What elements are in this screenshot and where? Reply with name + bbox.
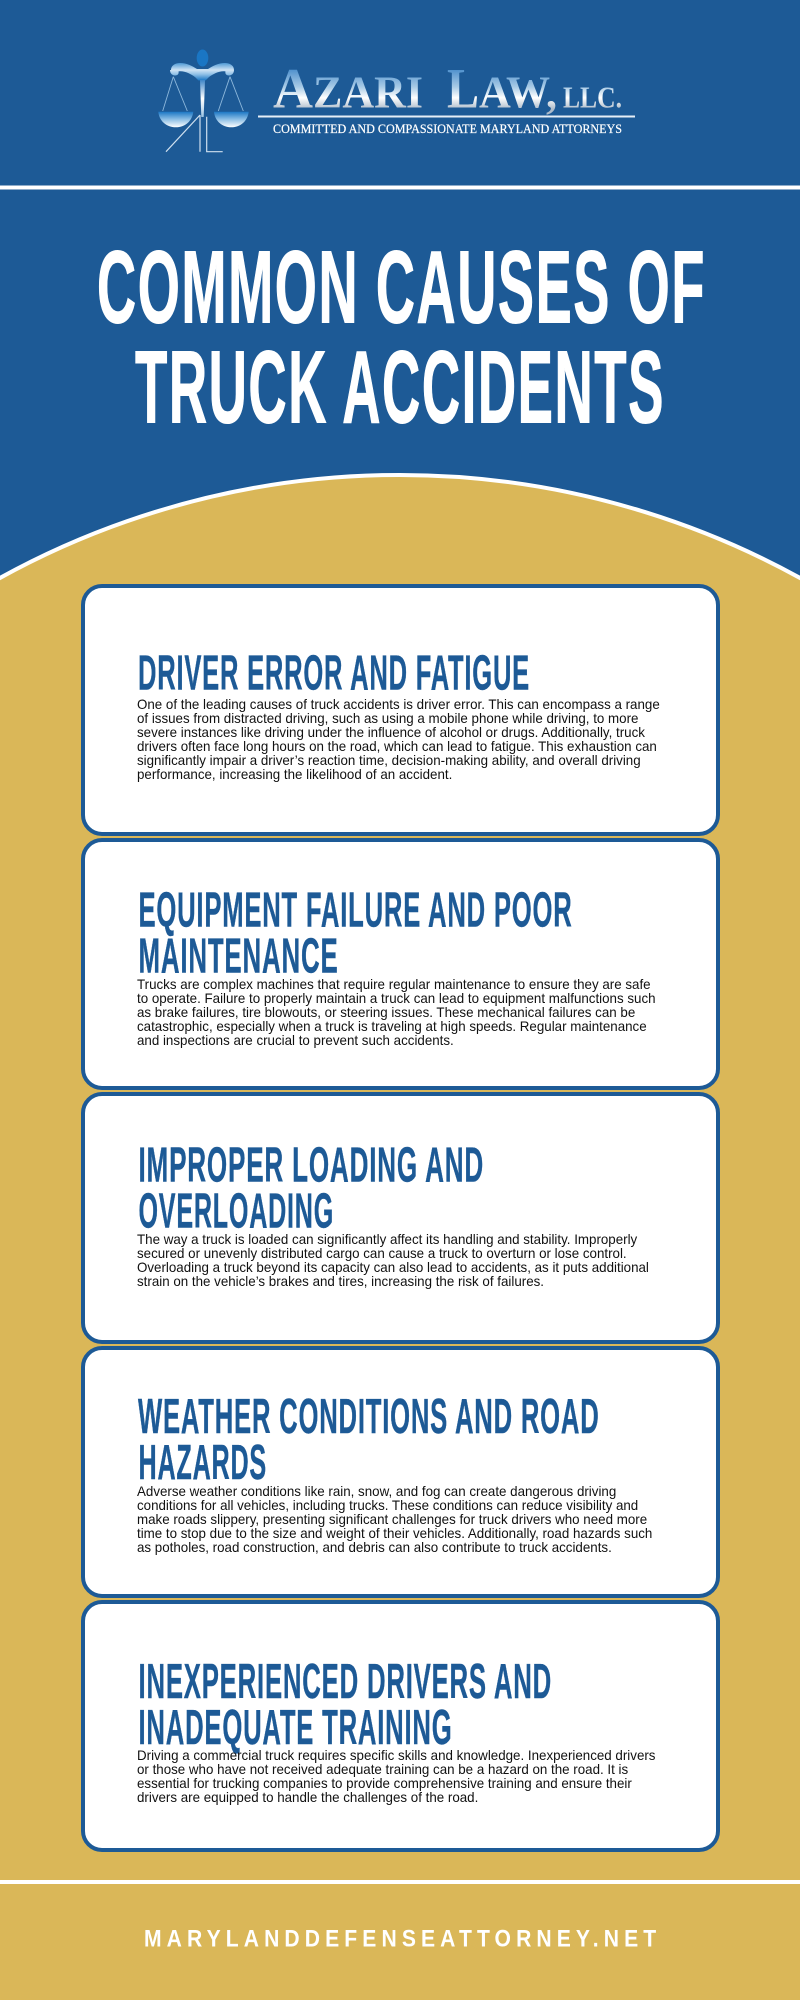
body text: and inspections are crucial to prevent such accidents.	[137, 1033, 454, 1048]
heading: MAINTENANCE	[138, 930, 338, 984]
body text: One of the leading causes of truck accidents is driver error. This can encompass a range	[137, 697, 660, 712]
body text: essential for trucking companies to provide comprehensive training and ensure their	[137, 1776, 632, 1791]
body text: Overloading a truck beyond its capacity can also lead to accidents, as it puts additional	[137, 1260, 649, 1275]
heading	[138, 1390, 600, 1490]
body text: drivers often face long hours on the road, which can lead to fatigue. This exhaustion can	[137, 739, 657, 754]
body text	[137, 1748, 656, 1805]
body text: make roads slippery, presenting significant challenges for truck drivers who need more	[137, 1512, 647, 1527]
panel: equipment failure and poor maintenance	[83, 840, 718, 1088]
panel: weather conditions and road hazards	[83, 1348, 718, 1596]
body text: as potholes, road construction, and debris can also contribute to truck accidents.	[137, 1540, 612, 1555]
body text: to operate. Failure to properly maintain a truck can lead to equipment malfunctions such	[137, 991, 656, 1006]
company name: AW,	[479, 66, 557, 118]
panel: driver error and fatigue	[83, 586, 718, 834]
logo	[158, 50, 635, 152]
body text: strain on the vehicle’s brakes and tires, increasing the risk of failures.	[137, 1274, 544, 1289]
company name: LLC.	[563, 80, 622, 114]
body text: time to stop due to the size and weight of their vehicles. Additionally, road hazards such	[137, 1526, 652, 1541]
body text: The way a truck is loaded can significantly affect its handling and stability. Improperly	[137, 1232, 637, 1247]
body text	[137, 1232, 649, 1289]
company name: L	[447, 58, 479, 120]
heading	[138, 884, 572, 984]
body text: or those who have not received adequate training can be a hazard on the road. It is	[137, 1762, 628, 1777]
heading: INADEQUATE TRAINING	[138, 1701, 452, 1755]
body text: of issues from distracted driving, such as using a mobile phone while driving, to more	[137, 711, 638, 726]
body text: severe instances like driving under the influence of alcohol or drugs. Additionally, truck	[137, 725, 645, 740]
body text	[137, 1484, 652, 1555]
icon: scales of justice	[158, 50, 249, 152]
company name	[273, 58, 622, 120]
body text: secured or unevenly distributed cargo can cause a truck to overturn or lose control.	[137, 1246, 627, 1261]
company name: A	[273, 58, 313, 120]
body text: conditions for all vehicles, including trucks. These conditions can reduce visibility and	[137, 1498, 638, 1513]
heading: HAZARDS	[138, 1436, 267, 1490]
body text	[137, 977, 656, 1048]
company name: ZARI	[313, 66, 423, 118]
heading: IMPROPER LOADING AND	[138, 1138, 484, 1192]
body text: as brake failures, tire blowouts, or steering issues. These mechanical failures can be	[137, 1005, 635, 1020]
body text: catastrophic, especially when a truck is traveling at high speeds. Regular maintenance	[137, 1019, 647, 1034]
body text: significantly impair a driver’s reaction time, decision-making ability, and overall driving	[137, 753, 641, 768]
title	[97, 230, 706, 444]
panel: improper loading and overloading	[83, 1094, 718, 1342]
heading: OVERLOADING	[138, 1184, 334, 1238]
body text: Driving a commercial truck requires specific skills and knowledge. Inexperienced drivers	[137, 1748, 656, 1763]
tagline: COMMITTED AND COMPASSIONATE MARYLAND ATTORNEYS	[273, 122, 622, 136]
heading	[138, 1138, 484, 1238]
body text: Adverse weather conditions like rain, snow, and fog can create dangerous driving	[137, 1484, 616, 1499]
gold arc background	[0, 475, 800, 2000]
body text: performance, increasing the likelihood of an accident.	[137, 767, 452, 782]
panel: inexperienced drivers and inadequate training	[83, 1602, 718, 1850]
heading	[138, 1655, 552, 1755]
body text	[137, 697, 660, 782]
footer website: MARYLANDDEFENSEATTORNEY.NET	[144, 1925, 656, 1952]
body text: Trucks are complex machines that require regular maintenance to ensure they are safe	[137, 977, 651, 992]
body text: drivers are equipped to handle the challenges of the road.	[137, 1790, 478, 1805]
